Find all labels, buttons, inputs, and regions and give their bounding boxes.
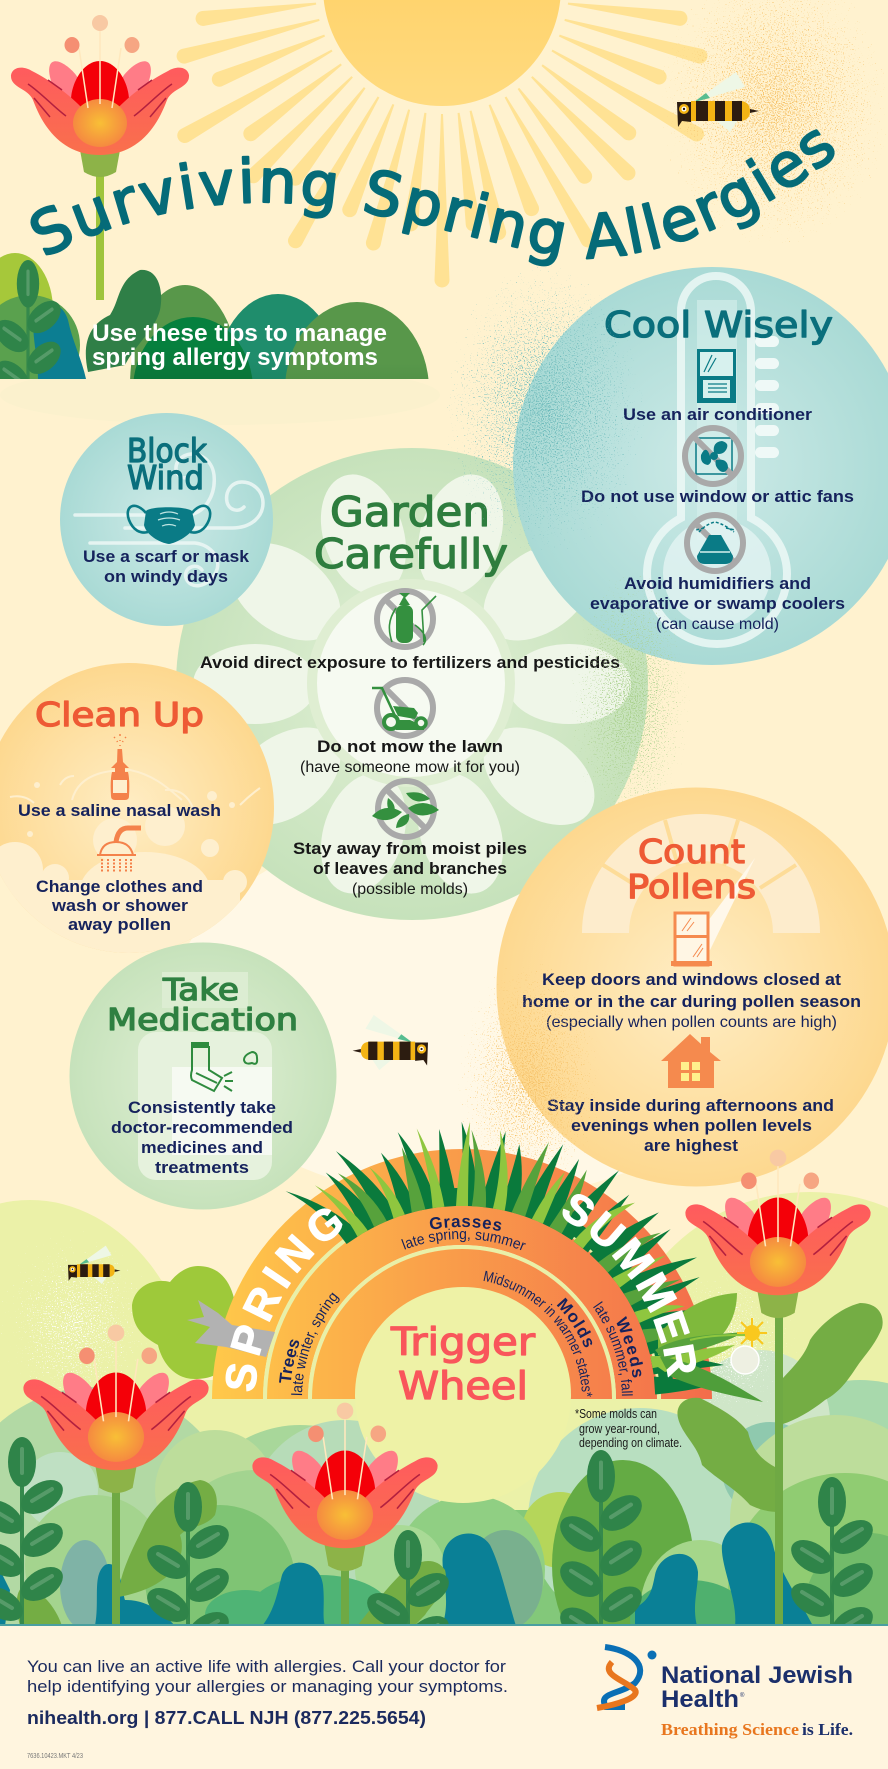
panel: garden carefully — [176, 448, 648, 920]
panel: cool wisely: evaporative or swamp coolers — [590, 594, 845, 613]
label: summer: SUMMER — [562, 1194, 696, 1378]
footer text: You can live an active life with allergies. Call your doctor for — [27, 1657, 506, 1676]
footnote: grow year-round, — [579, 1421, 660, 1436]
label: molds: Midsummer in warmer states* — [484, 1270, 592, 1397]
label: weeds: Weeds — [616, 1316, 643, 1378]
icon: humidifier — [687, 515, 743, 571]
ferns — [0, 1437, 69, 1647]
icon: sprayer — [377, 591, 436, 647]
text: humidifiers: Avoid humidifiers and — [624, 574, 811, 593]
tree — [132, 1266, 237, 1379]
panel: take medication: doctor-recommended — [111, 1118, 293, 1137]
orange pollen dust — [458, 960, 602, 1200]
panel: take medication: treatments — [155, 1158, 249, 1177]
text: change clothes: Change clothes and — [36, 877, 203, 896]
footer text — [27, 1657, 508, 1760]
flower stems — [112, 1315, 783, 1626]
panel: take medication: medicines and — [141, 1138, 263, 1157]
label: grasses: late spring, summer — [401, 1228, 526, 1250]
footnote — [575, 1406, 682, 1450]
heading: block wind: Block — [127, 431, 208, 470]
title: Surviving Spring Allergies — [30, 129, 835, 266]
label: grasses — [401, 1217, 526, 1250]
subtitle — [92, 320, 387, 371]
label: weeds: late summer, fall — [593, 1301, 633, 1396]
wheel bands — [238, 1174, 686, 1399]
text: do not mow: Do not mow the lawn — [317, 737, 503, 756]
bee middle — [353, 1015, 428, 1070]
panel: block wind: on windy days — [104, 567, 228, 586]
green hills — [0, 1350, 888, 1727]
logo: wordmark: Health — [661, 1686, 739, 1713]
footer text: 7636.10423.MKT 4/23 — [27, 1753, 83, 1760]
foreground plants — [0, 1150, 883, 1740]
sun — [323, 0, 561, 106]
heading: cool wisely: Cool Wisely — [604, 305, 833, 346]
logo: wordmark: National Jewish — [661, 1662, 853, 1689]
logo: tagline: Breathing Science — [661, 1720, 799, 1739]
subtitle: spring allergy symptoms — [92, 344, 378, 371]
icon: nasal spray — [111, 734, 129, 800]
bee top right — [677, 72, 759, 132]
heading: count pollens: Count — [638, 832, 745, 871]
foam and bubbles — [0, 770, 260, 960]
top left flower stem — [96, 170, 104, 300]
panel: garden carefully: Carefully — [314, 530, 508, 578]
text: stay inside: Stay inside during afternoons and — [547, 1096, 834, 1115]
heading: clean up: Clean Up — [35, 695, 204, 734]
teal pollen dust — [445, 265, 645, 555]
panel: block wind: Wind — [127, 458, 204, 497]
panel: count pollens: are highest — [644, 1136, 738, 1155]
icon: leaves — [372, 781, 439, 837]
icon: air conditioner — [698, 350, 735, 402]
label: trees: late winter, spring — [291, 1292, 340, 1396]
heading: trigger wheel: Wheel — [398, 1364, 528, 1408]
trigger wheel — [187, 1122, 763, 1503]
panel: clean up — [0, 663, 274, 960]
icon: house — [661, 1034, 721, 1088]
icon: mask — [128, 506, 210, 544]
text: window fans: Do not use window or attic fans — [581, 487, 854, 506]
flower left — [23, 1325, 209, 1493]
text: fertilizers: Avoid direct exposure to fertilizers and pesticides — [200, 653, 620, 672]
tree trunk — [187, 1300, 275, 1357]
label: molds: Molds — [556, 1298, 592, 1348]
text: consistently take: Consistently take — [128, 1098, 276, 1117]
logo: tagline — [661, 1720, 853, 1739]
footer text: help identifying your allergies or managing your symptoms. — [27, 1677, 508, 1696]
icon: inhaler — [191, 1043, 257, 1091]
footnote: *Some molds can — [575, 1406, 657, 1421]
wind swirls — [75, 454, 263, 586]
panel: take medication: Medication — [107, 1003, 298, 1038]
panel: garden carefully: (have someone mow it for you) — [300, 759, 520, 776]
text: air conditioner: Use an air conditioner — [623, 405, 812, 424]
green pollen dust — [570, 570, 690, 830]
icon: window — [671, 913, 712, 966]
text: saline wash: Use a saline nasal wash — [18, 801, 221, 820]
panel: count pollens: evenings when pollen levels — [571, 1116, 812, 1135]
panel: block wind — [60, 413, 273, 626]
center disc — [355, 1287, 571, 1503]
logo: wordmark — [661, 1662, 853, 1713]
sun rays — [175, 0, 709, 288]
pale hills at the bottom — [0, 1192, 888, 1640]
grass — [286, 1122, 724, 1395]
olive leaves — [17, 1303, 883, 1626]
pollen gauge — [582, 814, 820, 950]
pale background shapes — [0, 365, 770, 1200]
hills behind subtitle — [0, 253, 428, 379]
label: trees: Trees — [279, 1340, 300, 1383]
text: scarf or mask: Use a scarf or mask — [83, 547, 250, 566]
panel: count pollens: Pollens — [627, 867, 756, 906]
logo: tagline: is Life. — [802, 1720, 853, 1739]
panel: count pollens — [496, 788, 888, 1186]
panel: cool wisely: (can cause mold) — [656, 616, 779, 633]
panel: take medication — [70, 942, 336, 1210]
label: grasses: Grasses — [430, 1217, 502, 1231]
heading: garden carefully: Garden — [330, 488, 490, 536]
panel: count pollens: (especially when pollen counts are high) — [546, 1014, 837, 1031]
white speckle on pale hills — [0, 1225, 160, 1425]
text: keep doors: Keep doors and windows closed at — [542, 970, 841, 989]
panel: clean up: away pollen — [68, 915, 171, 934]
right grass tuft — [655, 1293, 763, 1402]
heading: trigger wheel: Trigger — [390, 1320, 535, 1364]
thermometer — [647, 276, 787, 644]
teal blobs — [0, 1522, 813, 1626]
white speckle right — [635, 1260, 805, 1430]
flower right — [685, 1150, 871, 1318]
panel: count pollens: home or in the car during pollen season — [522, 992, 861, 1011]
heading: trigger wheel — [390, 1320, 535, 1408]
panel: garden carefully: of leaves and branches — [313, 859, 507, 878]
label: spring: SPRING — [226, 1208, 342, 1392]
heading: take medication: Take — [162, 973, 239, 1008]
flower center — [252, 1403, 438, 1571]
panel: clean up: wash or shower — [51, 896, 188, 915]
panel: cool wisely — [513, 267, 888, 665]
medicine bottle shape — [138, 972, 272, 1180]
panel: garden carefully: (possible molds) — [352, 881, 468, 898]
icon: lawn mower — [372, 680, 433, 736]
logo: helix icon — [597, 1647, 656, 1708]
footnote: depending on climate. — [579, 1435, 682, 1450]
logo: wordmark: ® — [740, 1692, 745, 1699]
pollen dust top right — [660, 0, 888, 245]
icon: shower — [97, 828, 141, 873]
bee left — [68, 1246, 120, 1284]
top left flower — [11, 15, 189, 177]
dandelion — [690, 1318, 767, 1374]
text: moist piles: Stay away from moist piles — [293, 839, 527, 858]
footer text: nihealth.org | 877.CALL NJH (877.225.5654) — [27, 1707, 426, 1728]
footer — [0, 1624, 888, 1769]
subtitle: Use these tips to manage — [92, 320, 387, 347]
icon: fan — [685, 428, 741, 484]
